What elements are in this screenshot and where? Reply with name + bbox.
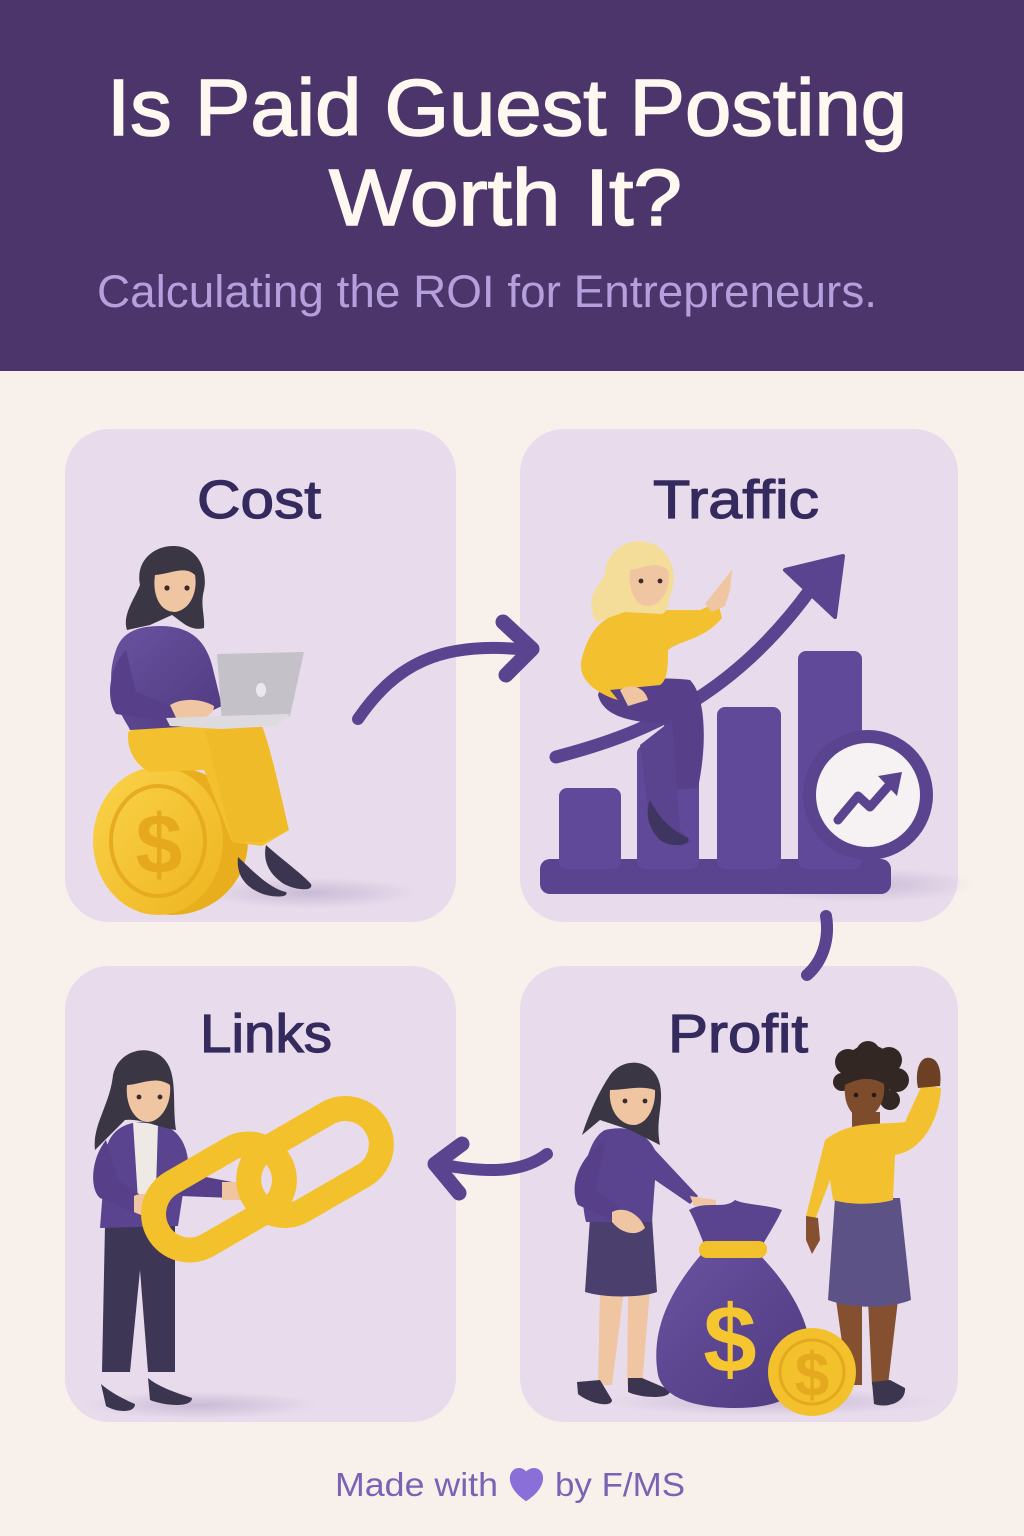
money bag [656, 1200, 856, 1416]
face details [137, 1095, 162, 1099]
title: Worth It? [329, 153, 682, 242]
left woman [575, 1063, 716, 1404]
heading: cost: Cost [197, 470, 321, 530]
right woman [806, 1041, 941, 1405]
title [107, 63, 907, 242]
face details [164, 585, 190, 591]
footer credit [335, 1466, 685, 1503]
panel: links [65, 966, 456, 1422]
panel: cost [65, 429, 456, 922]
illustration: woman with laptop on coin [93, 546, 420, 915]
arrow: traffic to profit [807, 916, 827, 975]
face details [623, 1099, 647, 1103]
footer credit: Made with [335, 1466, 498, 1503]
seated blonde woman [581, 541, 732, 846]
panel: profit [520, 966, 958, 1422]
illustration: woman holding chain [80, 1050, 394, 1419]
icon: trend badge [803, 730, 933, 860]
subtitle: Calculating the ROI for Entrepreneurs. [97, 266, 877, 317]
icon: heart [511, 1469, 542, 1500]
header band [0, 0, 1024, 371]
heading: profit: Profit [668, 1004, 808, 1064]
arrow: profit to links [435, 1144, 547, 1193]
icon: chain links [140, 1095, 394, 1263]
heading: links: Links [200, 1004, 332, 1064]
title: Is Paid Guest Posting [107, 63, 907, 152]
money bag: $ [795, 1341, 829, 1410]
arrow: cost to traffic [358, 622, 532, 719]
illustration: two women with money bag [575, 1041, 941, 1416]
heading: traffic: Traffic [653, 470, 819, 530]
curly hair [833, 1041, 909, 1110]
illustration: bar chart and rising arrow [540, 541, 980, 903]
money bag: $ [703, 1286, 757, 1393]
face details [639, 579, 662, 583]
illustration: woman with laptop on coin: $ [136, 797, 182, 891]
footer credit: by F/MS [555, 1466, 685, 1503]
face details [854, 1093, 876, 1097]
panel: traffic [520, 429, 980, 922]
